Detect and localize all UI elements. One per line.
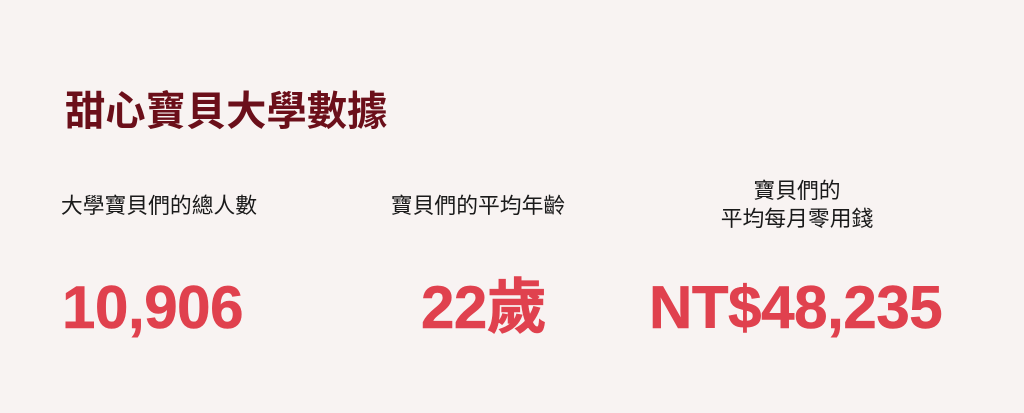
stat: total students: 10,906	[62, 274, 243, 341]
label: monthly allowance	[721, 178, 873, 231]
title: 甜心寶貝大學數據	[65, 89, 387, 134]
label: monthly allowance: 平均每月零用錢	[721, 206, 873, 231]
label: total students: 大學寶貝們的總人數	[61, 193, 257, 218]
stat: monthly allowance: NT$48,235	[649, 274, 942, 341]
stat: average age: 22歲	[421, 274, 546, 341]
label: average age: 寶貝們的平均年齡	[391, 193, 565, 218]
label: monthly allowance: 寶貝們的	[753, 178, 841, 203]
